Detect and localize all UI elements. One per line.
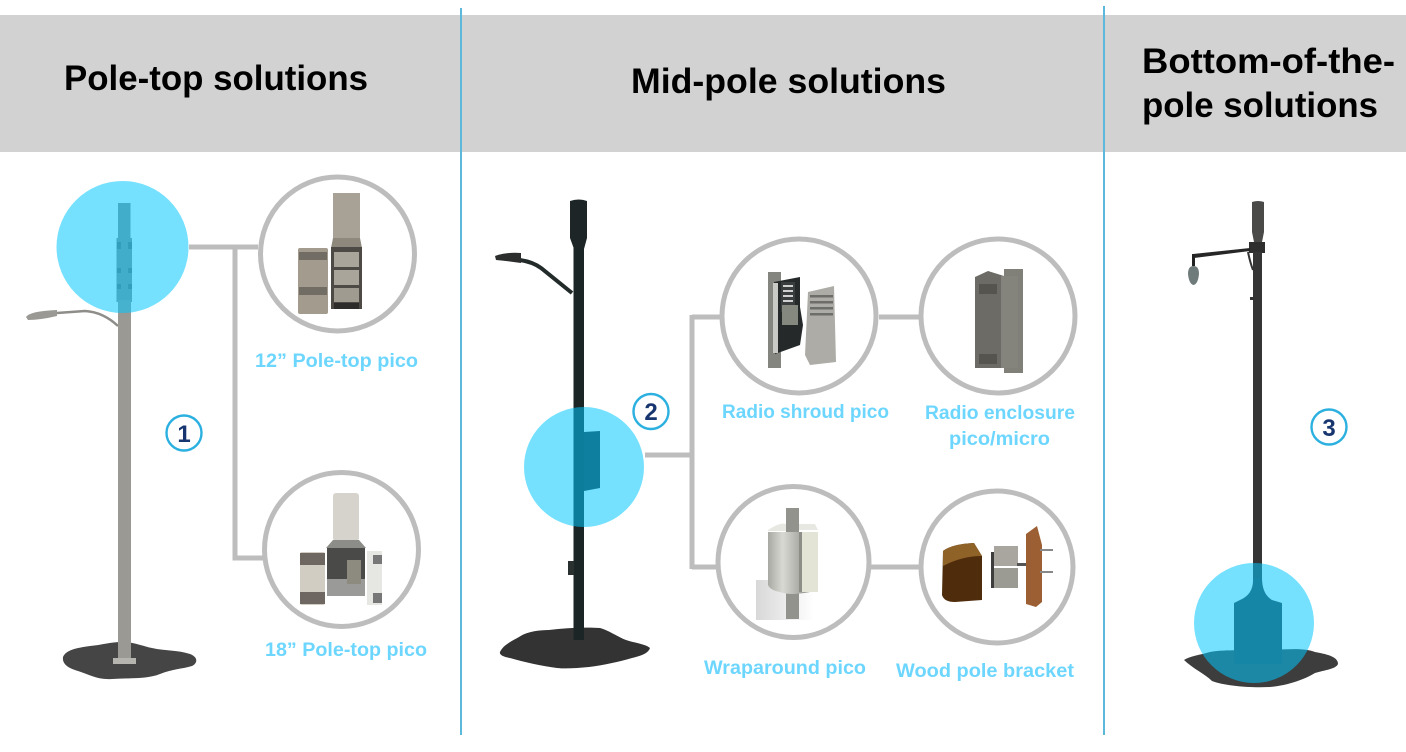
connector lines — [189, 247, 264, 558]
highlight circle: pole top — [56, 181, 188, 313]
badge 1: 1 — [177, 421, 191, 448]
icon: radio shroud — [768, 272, 836, 368]
detail circle: wood pole bracket — [921, 491, 1073, 643]
heading: bottom-of-the-pole solutions: Bottom-of-the- — [1142, 42, 1395, 81]
light pole 1 — [26, 203, 136, 664]
highlight circle: pole base — [1194, 563, 1314, 683]
icon: 18 inch radome and open radio — [300, 493, 382, 605]
detail circle: 18 inch pole-top pico — [264, 472, 418, 626]
label: 18 inch pole-top pico: 18” Pole-top pico — [265, 640, 427, 661]
highlight circle: mid pole — [524, 407, 644, 527]
icon: 12 inch radome and open radio — [298, 193, 362, 314]
label: wood pole bracket: Wood pole bracket — [896, 661, 1075, 682]
panel: mid-pole solutions — [495, 200, 1075, 682]
badge 3: 3 — [1322, 415, 1336, 442]
heading: bottom-of-the-pole solutions: pole solutions — [1142, 86, 1378, 125]
light pole 3 — [1188, 201, 1282, 664]
icon: wraparound cylinder — [756, 508, 818, 620]
header band — [0, 15, 1406, 152]
heading: pole-top solutions: Pole-top solutions — [64, 59, 368, 98]
ground patch 3 — [1184, 649, 1338, 687]
panel: pole-top solutions — [26, 177, 427, 679]
ground patch 2 — [500, 628, 650, 668]
detail circle: wraparound pico — [718, 486, 869, 638]
detail circle: 12 inch pole-top pico — [260, 177, 414, 331]
label: radio enclosure pico/micro: Radio enclosure — [925, 403, 1075, 424]
label: 12 inch pole-top pico: 12” Pole-top pico — [255, 351, 418, 372]
light pole 2 — [495, 200, 600, 640]
panel: bottom-of-the-pole solutions — [1184, 201, 1346, 687]
label: wraparound pico: Wraparound pico — [704, 658, 866, 679]
detail circle: radio enclosure — [921, 239, 1075, 393]
badge 1 — [166, 416, 202, 450]
icon: radio enclosure — [975, 269, 1023, 373]
label: radio enclosure pico/micro: pico/micro — [949, 429, 1050, 450]
badge 2 — [634, 394, 668, 429]
icon: wood pole bracket — [942, 526, 1053, 607]
heading: mid-pole solutions: Mid-pole solutions — [631, 62, 946, 101]
connector lines — [645, 315, 919, 569]
ground patch 1 — [63, 642, 196, 679]
heading: bottom-of-the-pole solutions — [1142, 42, 1395, 125]
detail circle: radio shroud pico — [722, 239, 876, 393]
badge 3 — [1312, 410, 1346, 444]
column divider right — [1103, 6, 1105, 735]
badge 2: 2 — [644, 399, 658, 426]
label: radio enclosure pico/micro — [925, 403, 1075, 450]
column divider left — [460, 8, 462, 735]
label: radio shroud pico: Radio shroud pico — [722, 402, 889, 423]
